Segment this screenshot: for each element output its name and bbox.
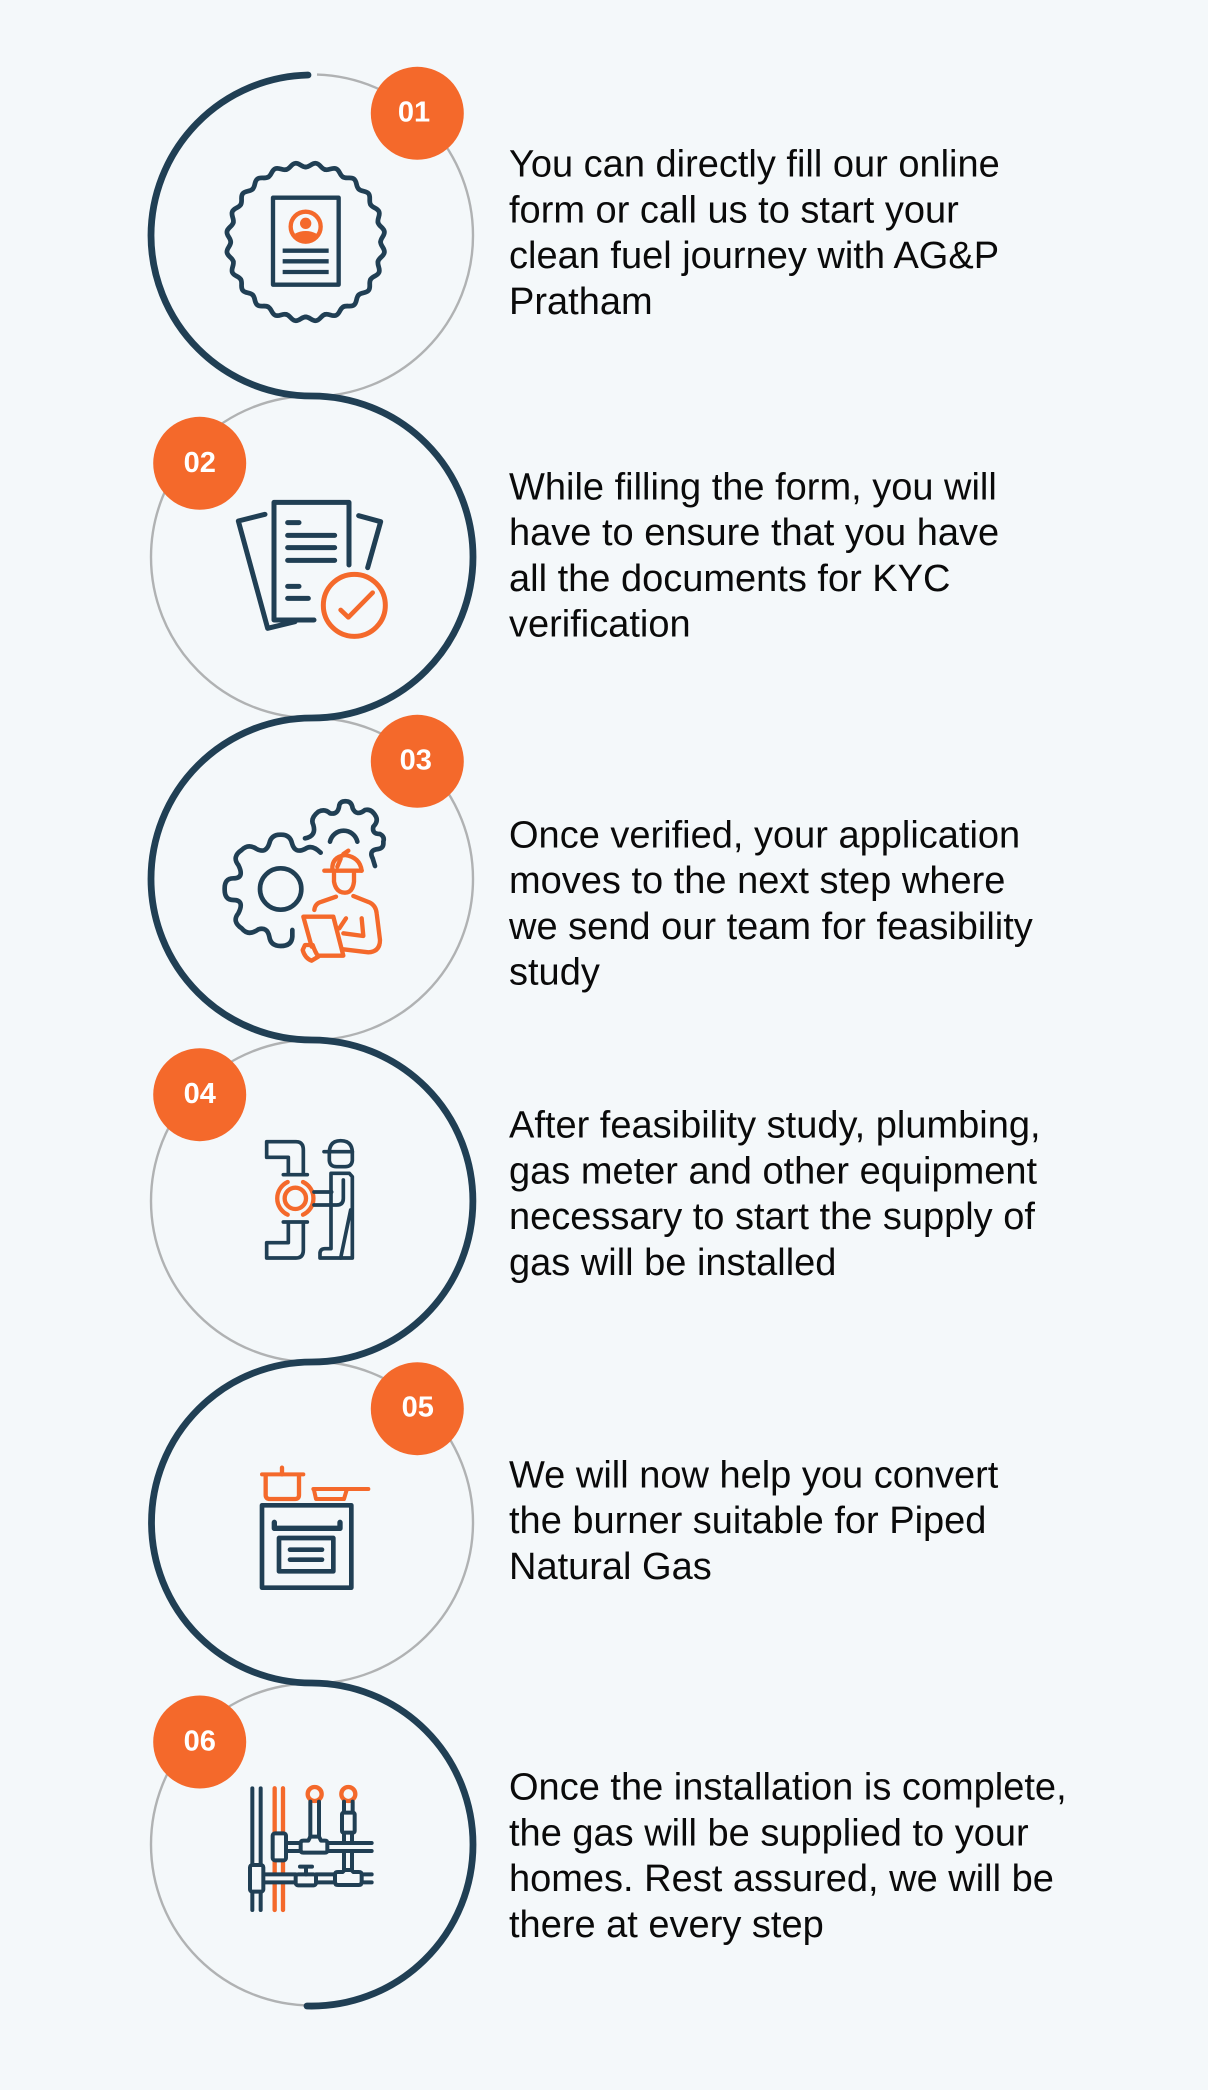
text block 03: moves to the next step where bbox=[509, 860, 1005, 902]
orange joint bbox=[277, 1182, 313, 1215]
badge 03 bbox=[371, 715, 464, 808]
icon: plumber with pipe bbox=[267, 1141, 352, 1258]
text block 04: gas will be installed bbox=[509, 1242, 836, 1284]
icon: documents with check bbox=[238, 502, 385, 636]
badge 04 bbox=[153, 1048, 246, 1141]
text block 01: You can directly fill our online bbox=[509, 144, 1000, 186]
badge 03: 03 bbox=[400, 745, 432, 777]
profile avatar bbox=[291, 212, 321, 242]
badge 05: 05 bbox=[402, 1391, 434, 1423]
engineer bbox=[303, 851, 380, 961]
text block 02: all the documents for KYC bbox=[509, 558, 950, 600]
check badge bbox=[323, 574, 385, 636]
badge 06: 06 bbox=[184, 1725, 216, 1757]
document stack bbox=[238, 502, 381, 628]
document sheet bbox=[273, 198, 339, 285]
text block 01: Pratham bbox=[509, 281, 653, 323]
text block 05: the burner suitable for Piped bbox=[509, 1500, 986, 1542]
badge 02: 02 bbox=[184, 447, 216, 479]
grey ring 06 bbox=[151, 1684, 473, 2006]
panel: step 02 bbox=[151, 396, 999, 718]
icon: gas pipe network bbox=[250, 1787, 372, 1910]
text block 03: Once verified, your application bbox=[509, 814, 1020, 856]
text block 05: We will now help you convert bbox=[509, 1454, 999, 1496]
badge 02 bbox=[153, 417, 246, 510]
text block 04: necessary to start the supply of bbox=[509, 1196, 1035, 1238]
panel: step 01 bbox=[225, 67, 1000, 397]
panel: step 03 bbox=[151, 715, 1033, 1040]
grey ring 03 bbox=[151, 718, 473, 1040]
text block 04: After feasibility study, plumbing, bbox=[509, 1105, 1041, 1147]
panel: step 05 bbox=[151, 1362, 999, 1684]
grey ring 04 bbox=[151, 1040, 473, 1362]
pot and pan bbox=[262, 1468, 368, 1499]
text block 03: study bbox=[509, 951, 600, 993]
text block 05: Natural Gas bbox=[509, 1546, 712, 1588]
orange risers bbox=[275, 1787, 355, 1910]
dark pipework bbox=[250, 1788, 372, 1910]
plumber figure bbox=[314, 1141, 352, 1258]
dark winding progress line bbox=[151, 75, 473, 2006]
badge 01: 01 bbox=[398, 96, 430, 128]
text block 02: While filling the form, you will bbox=[509, 466, 997, 508]
badge 01 bbox=[371, 67, 464, 160]
grey ring 01 bbox=[312, 75, 473, 397]
text block 06: there at every step bbox=[509, 1904, 824, 1946]
text block 03: we send our team for feasibility bbox=[508, 906, 1033, 948]
gears bbox=[225, 801, 384, 946]
scalloped seal bbox=[225, 161, 387, 323]
icon: oven with pot and pan bbox=[262, 1468, 368, 1588]
pipes bbox=[267, 1142, 307, 1258]
badge 05 bbox=[371, 1362, 464, 1455]
text block 04: gas meter and other equipment bbox=[509, 1150, 1038, 1192]
panel: step 06 bbox=[151, 1684, 1067, 2006]
text block 06: the gas will be supplied to your bbox=[509, 1812, 1029, 1854]
grey ring 02 bbox=[151, 396, 473, 718]
text block 06: homes. Rest assured, we will be bbox=[509, 1858, 1054, 1900]
grey ring 05 bbox=[151, 1362, 473, 1684]
icon: gears and engineer bbox=[225, 801, 384, 961]
text block 02: have to ensure that you have bbox=[509, 512, 999, 554]
text block 06: Once the installation is complete, bbox=[509, 1767, 1067, 1809]
oven bbox=[262, 1505, 351, 1588]
text block 02: verification bbox=[509, 603, 691, 645]
badge 04: 04 bbox=[184, 1078, 216, 1110]
icon: certified document bbox=[225, 161, 387, 323]
panel: step 04 bbox=[151, 1040, 1041, 1362]
text block 01: form or call us to start your bbox=[509, 189, 959, 231]
badge 06 bbox=[153, 1696, 246, 1788]
text block 01: clean fuel journey with AG&P bbox=[509, 235, 999, 277]
